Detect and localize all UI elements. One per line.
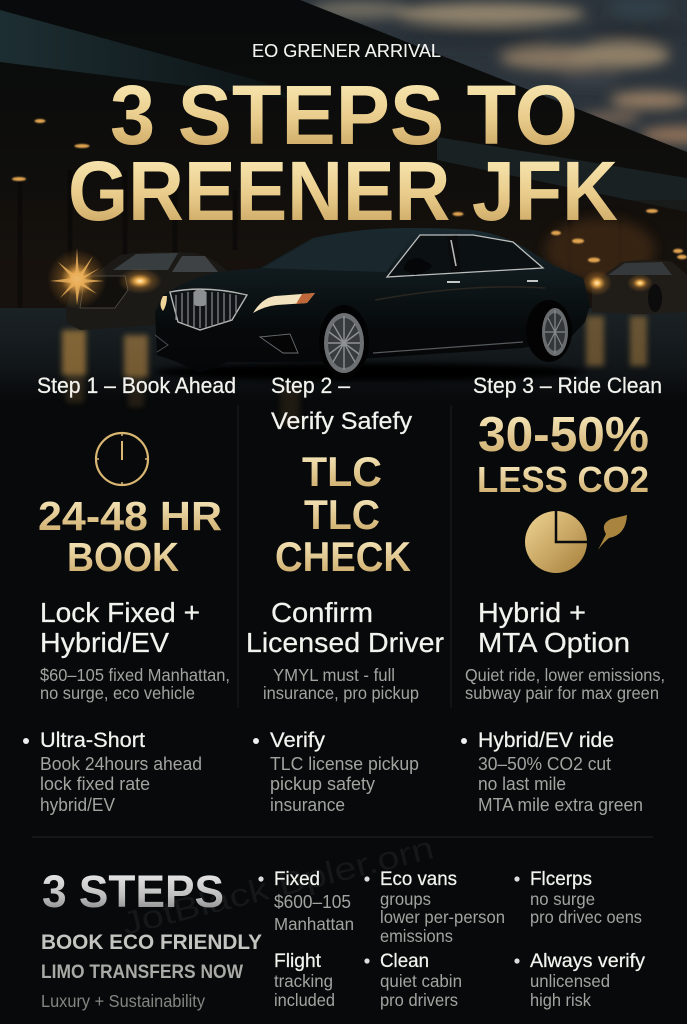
subheading: Confirm <box>271 597 373 628</box>
step 2 heading: Step 2 – <box>271 373 351 398</box>
stat: 30-50% less CO2 <box>477 408 649 500</box>
description <box>40 665 230 703</box>
step 2 heading <box>271 373 412 435</box>
subheading: Hybrid + <box>478 597 586 628</box>
subheading <box>246 597 444 658</box>
subheading: Lock Fixed + <box>40 597 200 628</box>
feature: clean: quiet cabin <box>380 971 462 991</box>
feature: flight: tracking <box>274 971 333 991</box>
bullet block: hybrid/EV ride: MTA mile extra green <box>478 794 643 815</box>
description: no surge, eco vehicle <box>40 683 195 703</box>
bullet block: verify: pickup safety <box>270 773 376 794</box>
subheading: Hybrid/EV <box>40 627 169 658</box>
bullet block: verify <box>253 729 419 815</box>
stat: TLC check: TLC <box>302 448 382 495</box>
column dividers <box>238 405 451 708</box>
feature: clean: Clean <box>380 950 429 972</box>
feature: flight <box>274 950 335 1010</box>
bullet block: ultra-short: hybrid/EV <box>40 794 116 815</box>
description: YMYL must - full <box>273 665 395 685</box>
description: Quiet ride, lower emissions, <box>465 665 665 685</box>
description: $60–105 fixed Manhattan, <box>40 665 230 685</box>
feature: clean <box>364 950 462 1010</box>
feature: flcerps: Flcerps <box>530 868 592 890</box>
bullet block: hybrid/EV ride: no last mile <box>478 773 566 794</box>
feature: flcerps <box>514 868 642 927</box>
panel: call to action: 3 STEPS <box>42 866 224 917</box>
description: subway pair for max green <box>465 683 659 703</box>
background car left <box>47 248 230 330</box>
bullet block: hybrid/EV ride: 30–50% CO2 cut <box>478 753 611 774</box>
feature: clean: pro drivers <box>380 990 458 1010</box>
stat: TLC check <box>275 448 411 580</box>
feature: fixed <box>258 868 354 934</box>
icon: clock <box>96 433 148 485</box>
feature: eco vans: groups <box>380 889 431 909</box>
description <box>263 665 419 703</box>
feature: always verify: high risk <box>530 990 591 1010</box>
panel: step 2 <box>246 373 444 703</box>
bullet block: hybrid/EV ride <box>461 729 643 815</box>
stat: TLC check: TLC <box>304 491 380 538</box>
feature: fixed: $600–105 <box>274 891 351 912</box>
feature: eco vans: lower per-person <box>380 907 505 927</box>
feature: always verify: Always verify <box>530 950 645 972</box>
icon: leaf <box>598 515 627 550</box>
feature: fixed: Fixed <box>274 868 320 890</box>
description <box>465 665 665 703</box>
bullet block: hybrid/EV ride: Hybrid/EV ride <box>478 729 614 752</box>
subheading: MTA Option <box>478 627 630 658</box>
feature: flcerps: no surge <box>530 889 595 909</box>
feature: fixed: Manhattan <box>274 914 354 934</box>
step 1 heading: Step 1 – Book Ahead <box>37 373 236 398</box>
panel: call to action: BOOK ECO FRIENDLY <box>41 931 262 954</box>
subheading <box>40 597 200 658</box>
panel: call to action: Luxury + Sustainability <box>41 991 205 1011</box>
bullet block: verify: insurance <box>270 794 345 815</box>
feature: eco vans <box>364 868 505 946</box>
feature: eco vans: emissions <box>380 926 453 946</box>
hero scene: terminal at dusk <box>0 0 687 425</box>
feature: eco vans: Eco vans <box>380 868 457 890</box>
title <box>68 68 618 238</box>
bullet block: ultra-short: lock fixed rate <box>40 773 150 794</box>
panel: step 1 <box>37 373 236 703</box>
subheading: Licensed Driver <box>246 627 444 658</box>
feature: always verify: unlicensed <box>530 971 610 991</box>
feature: flcerps: pro drivec oens <box>530 907 642 927</box>
subheading <box>478 597 630 658</box>
stat: 24-48 hr book: BOOK <box>67 534 179 580</box>
main black limo <box>155 228 590 381</box>
watermark: JotBlack Bpler.orn <box>118 829 437 942</box>
stat: 24-48 hr book <box>38 493 222 580</box>
bullet block: ultra-short <box>23 729 202 815</box>
icon: pie chart <box>525 511 589 573</box>
stat: 24-48 hr book: 24-48 HR <box>38 493 222 539</box>
background car right <box>582 260 687 314</box>
panel: call to action: LIMO TRANSFERS NOW <box>41 962 243 983</box>
step 3 heading: Step 3 – Ride Clean <box>473 373 662 398</box>
description: insurance, pro pickup <box>263 683 419 703</box>
feature: flight: included <box>274 990 335 1010</box>
bullet block: verify: Verify <box>270 729 326 752</box>
title: 3 STEPS TO <box>110 68 578 162</box>
stat: 30-50% less CO2: 30-50% <box>478 408 649 462</box>
feature: flight: Flight <box>274 950 322 972</box>
step 2 heading: Verify Safefy <box>271 408 412 435</box>
title: GREENER JFK <box>68 144 618 238</box>
bullet block: verify: TLC license pickup <box>270 753 419 774</box>
bullet block: ultra-short: Ultra-Short <box>40 729 145 752</box>
stat: 30-50% less CO2: LESS CO2 <box>477 459 649 500</box>
stat: TLC check: CHECK <box>275 533 411 580</box>
panel: call to action <box>41 866 262 1011</box>
feature: always verify <box>514 950 645 1010</box>
bullet block: ultra-short: Book 24hours ahead <box>40 753 202 774</box>
eyebrow: EO GRENER ARRIVAL <box>252 41 441 61</box>
panel: step 3 <box>465 373 665 703</box>
